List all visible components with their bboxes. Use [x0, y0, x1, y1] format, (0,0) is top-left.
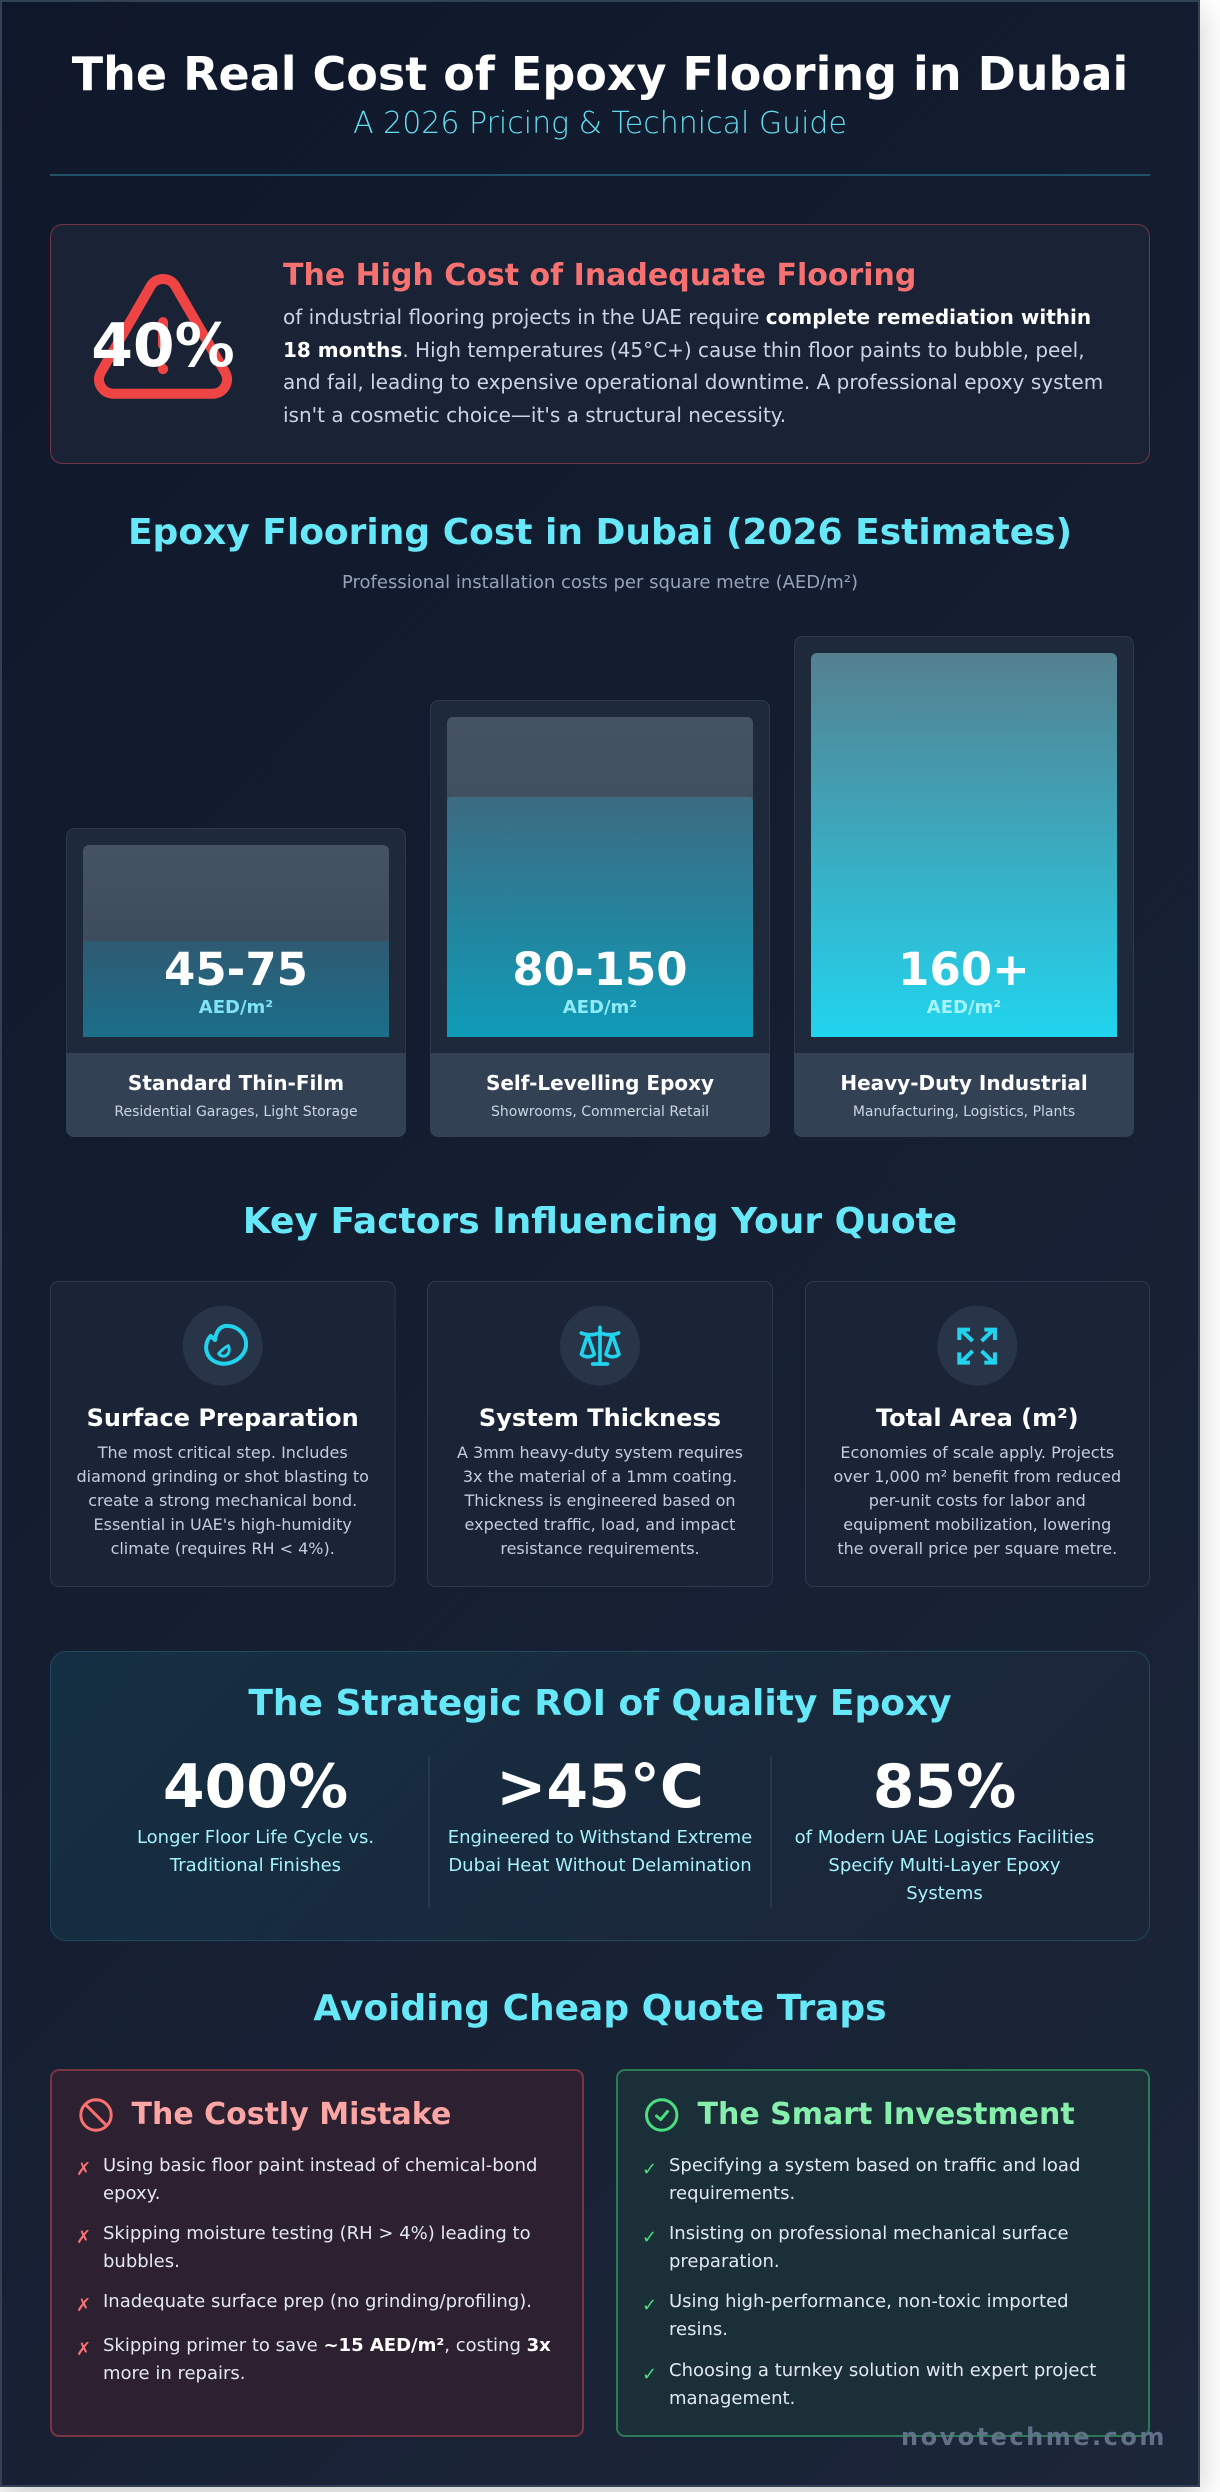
stat: 45C: Dubai Heat Without Delamination	[448, 1855, 752, 1876]
list: mistakes	[76, 2155, 551, 2384]
alert body text: isn't a cosmetic choice—it's a structural necessity.	[283, 403, 786, 427]
panel: smart investment	[617, 2070, 1149, 2436]
panel: system thickness: A 3mm heavy-duty system requires	[457, 1443, 743, 1462]
alert body text: of industrial flooring projects in the UAE require complete remediation within	[283, 305, 1091, 329]
bar: self-levelling epoxy	[430, 700, 770, 1137]
panel: total area: equipment mobilization, lowering	[843, 1515, 1111, 1534]
stat: 400%: Longer Floor Life Cycle vs.	[137, 1827, 374, 1848]
list: mistakes: Using basic floor paint instead of chemical-bond	[103, 2155, 537, 2176]
stat: 400%: Traditional Finishes	[169, 1855, 341, 1876]
list: smart choices: ✓	[642, 2159, 657, 2180]
panel: total area: Economies of scale apply. Projects	[840, 1443, 1114, 1462]
bar: self-levelling epoxy: Self-Levelling Epoxy	[486, 1071, 714, 1095]
panel: system thickness: resistance requirements.	[500, 1539, 700, 1558]
bar: self-levelling epoxy: Showrooms, Commercial Retail	[491, 1104, 709, 1120]
stat: 40%: 40%	[91, 311, 235, 381]
panel: high cost alert	[50, 224, 1150, 464]
panel: system thickness: expected traffic, load, and impact	[465, 1515, 735, 1534]
bar chart	[66, 636, 1134, 1137]
icon: expand arrows	[959, 1330, 995, 1363]
panel: strategic ROI	[50, 1652, 1150, 1940]
alert body text: and fail, leading to expensive operational downtime. A professional epoxy system	[283, 370, 1103, 394]
subtitle: A 2026 Pricing & Technical Guide	[353, 106, 847, 141]
bar: self-levelling epoxy: AED/m²	[563, 997, 637, 1018]
list: smart choices: Choosing a turnkey solution with expert project	[669, 2360, 1096, 2381]
panel: system thickness	[428, 1282, 772, 1586]
panel: costly mistake	[51, 2070, 583, 2436]
list: mistakes: ✗	[76, 2295, 91, 2316]
stat: 85%: Systems	[906, 1883, 983, 1904]
panel: system thickness: 3x the material of a 1mm coating.	[463, 1467, 737, 1486]
icon: check circle	[646, 2100, 677, 2130]
list: mistakes: ✗	[76, 2159, 91, 2180]
list: smart choices: resins.	[669, 2319, 728, 2340]
list: mistakes: epoxy.	[103, 2183, 160, 2204]
stat: 400%: 400%	[163, 1752, 348, 1822]
list: mistakes: bubbles.	[103, 2251, 180, 2272]
list: smart choices: requirements.	[669, 2183, 795, 2204]
list: mistakes: more in repairs.	[103, 2363, 246, 2384]
bar: standard thin-film: AED/m²	[199, 997, 273, 1018]
panel: total area: over 1,000 m² benefit from reduced	[833, 1467, 1121, 1486]
bar: standard thin-film: 45-75	[164, 943, 308, 996]
list: smart choices: Specifying a system based on traffic and load	[669, 2155, 1080, 2176]
panel: surface preparation	[50, 1282, 395, 1586]
heading: key factors: Key Factors Influencing Your Quote	[243, 1201, 957, 1242]
bar: self-levelling epoxy: 80-150	[512, 943, 688, 996]
ROI heading: The Strategic ROI of Quality Epoxy	[248, 1683, 952, 1724]
panel: total area: per-unit costs for labor and	[869, 1491, 1086, 1510]
heading: cost section: Epoxy Flooring Cost in Dubai (2026 Estimates)	[128, 512, 1072, 553]
list: mistakes: Skipping moisture testing (RH > 4%) leading to	[103, 2223, 531, 2244]
panel: surface preparation: Essential in UAE's high-humidity	[94, 1515, 352, 1534]
panel: total area: the overall price per square metre.	[837, 1539, 1117, 1558]
bar: standard thin-film: Standard Thin-Film	[128, 1071, 344, 1095]
list: smart choices	[642, 2155, 1096, 2409]
panel: system thickness: System Thickness	[479, 1404, 721, 1432]
icon: balance scale	[581, 1327, 619, 1364]
panel: surface preparation: climate (requires RH < 4%).	[111, 1539, 335, 1558]
list: smart choices: Using high-performance, non-toxic imported	[669, 2291, 1069, 2312]
stat: 45C	[448, 1752, 752, 1876]
panel: surface preparation: Surface Preparation	[87, 1404, 359, 1432]
title: The Real Cost of Epoxy Flooring in Dubai	[72, 47, 1128, 101]
list: mistakes: Skipping primer to save ~15 AED/m², costing 3x	[103, 2335, 551, 2356]
bar: heavy-duty industrial: Manufacturing, Logistics, Plants	[853, 1104, 1075, 1120]
panel: costly mistake: The Costly Mistake	[132, 2097, 451, 2132]
icon: flame	[206, 1326, 246, 1364]
panel: surface preparation: The most critical step. Includes	[97, 1443, 348, 1462]
stat: 45C: Engineered to Withstand Extreme	[448, 1827, 752, 1848]
panel: system thickness: Thickness is engineered based on	[463, 1491, 736, 1510]
panel: surface preparation: create a strong mechanical bond.	[88, 1491, 357, 1510]
bar: heavy-duty industrial: 160+	[898, 943, 1030, 996]
icon: prohibited	[81, 2100, 111, 2130]
bar: standard thin-film: Residential Garages, Light Storage	[114, 1104, 358, 1120]
bar: heavy-duty industrial: AED/m²	[927, 997, 1001, 1018]
list: smart choices: preparation.	[669, 2251, 780, 2272]
list: smart choices: management.	[669, 2388, 795, 2409]
alert body text: 18 months. High temperatures (45°C+) cause thin floor paints to bubble, peel,	[283, 338, 1085, 362]
alert body text	[283, 305, 1103, 427]
stat: 400%	[137, 1752, 374, 1876]
panel: total area: Total Area (m²)	[876, 1404, 1079, 1432]
heading: cheap quote traps: Avoiding Cheap Quote Traps	[313, 1988, 887, 2029]
watermark: novotechme.com	[901, 2423, 1167, 2451]
panel: total area	[806, 1282, 1150, 1586]
list: mistakes: ✗	[76, 2339, 91, 2360]
panel: surface preparation: diamond grinding or shot blasting to	[76, 1467, 369, 1486]
icon: warning triangle	[99, 279, 227, 394]
list: mistakes: ✗	[76, 2227, 91, 2248]
bar: standard thin-film	[66, 828, 406, 1137]
list: smart choices: ✓	[642, 2364, 657, 2385]
list: mistakes: Inadequate surface prep (no grinding/profiling).	[103, 2291, 532, 2312]
list: smart choices: ✓	[642, 2227, 657, 2248]
stat: 45C: >45°C	[496, 1752, 704, 1822]
bar: heavy-duty industrial	[794, 636, 1134, 1137]
bar: heavy-duty industrial: Heavy-Duty Industrial	[840, 1071, 1088, 1095]
list: smart choices: Insisting on professional mechanical surface	[669, 2223, 1069, 2244]
subheading: cost section: Professional installation costs per square metre (AED/m²)	[342, 572, 858, 593]
list: smart choices: ✓	[642, 2295, 657, 2316]
stat: 85%: Specify Multi-Layer Epoxy	[828, 1855, 1061, 1876]
stat: 85%	[795, 1752, 1094, 1904]
stat: 85%: 85%	[873, 1752, 1016, 1822]
panel: smart investment: The Smart Investment	[698, 2097, 1075, 2132]
stat: 85%: of Modern UAE Logistics Facilities	[795, 1827, 1094, 1848]
alert heading: The High Cost of Inadequate Flooring	[283, 258, 916, 293]
